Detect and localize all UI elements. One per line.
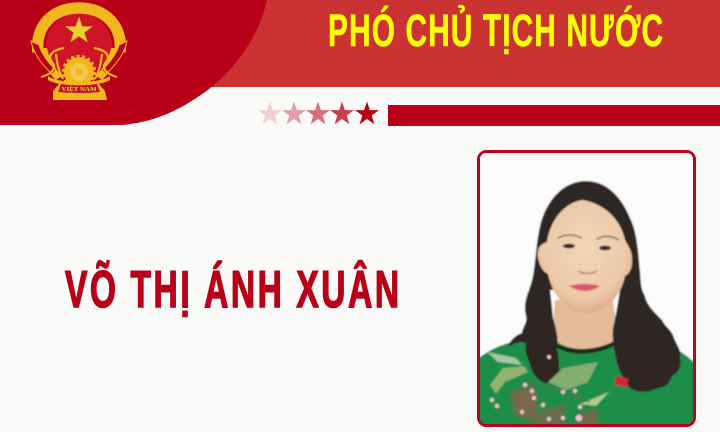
portrait photo xyxy=(470,148,700,432)
dark red curved header panel xyxy=(0,0,267,125)
rating stars xyxy=(258,102,379,124)
header band xyxy=(0,0,720,87)
person name: VÕ THỊ ÁNH XUÂN xyxy=(65,259,399,319)
icon: national emblem of Vietnam: VIỆT NAM xyxy=(62,85,96,93)
icon: national emblem of Vietnam xyxy=(31,8,127,100)
header rule bar xyxy=(388,105,720,126)
title: PHÓ CHỦ TỊCH NƯỚC xyxy=(328,5,663,57)
